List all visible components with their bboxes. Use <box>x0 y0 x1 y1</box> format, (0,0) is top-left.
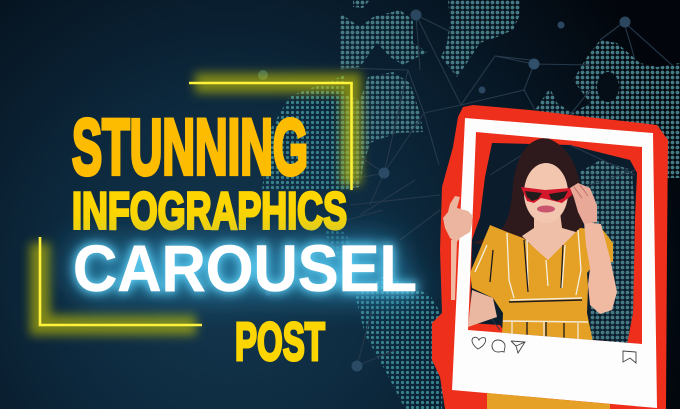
photo: woman with social post frame <box>432 105 668 409</box>
dress below frame <box>487 393 610 409</box>
raised forearm <box>584 222 617 314</box>
hair <box>473 138 585 250</box>
heading: CAROUSEL: CAROUSEL <box>73 231 417 305</box>
frame opening with backdrop <box>468 138 637 344</box>
heading: INFOGRAPHICS: INFOGRAPHICS <box>72 182 347 240</box>
hair fringe <box>560 170 563 174</box>
icon: heart <box>472 337 486 349</box>
network lines and nodes <box>258 10 672 372</box>
icon: comment <box>492 340 505 352</box>
heading: CAROUSEL: CAROUSEL <box>73 231 417 305</box>
heading: CAROUSEL: CAROUSEL <box>73 231 417 305</box>
arm behind frame <box>451 240 457 300</box>
icon: bookmark <box>623 351 636 363</box>
world map dots <box>262 0 680 409</box>
heading: POST: POST <box>235 312 325 372</box>
heading: STUNNING: STUNNING <box>72 102 308 191</box>
neck and chest <box>522 216 576 260</box>
neon frame: top right corner <box>189 83 352 190</box>
hand on glasses <box>570 183 597 224</box>
dress stripes <box>475 230 588 340</box>
sunglasses <box>521 187 572 203</box>
white frame <box>452 118 657 408</box>
lower arm <box>468 290 497 327</box>
left hand gripping frame <box>443 196 473 243</box>
red torn paper backing <box>432 105 668 409</box>
neon frame: bottom left corner <box>40 237 202 325</box>
mouth <box>537 206 555 212</box>
dress <box>470 225 613 342</box>
face <box>524 163 568 223</box>
icon: send <box>511 341 525 353</box>
